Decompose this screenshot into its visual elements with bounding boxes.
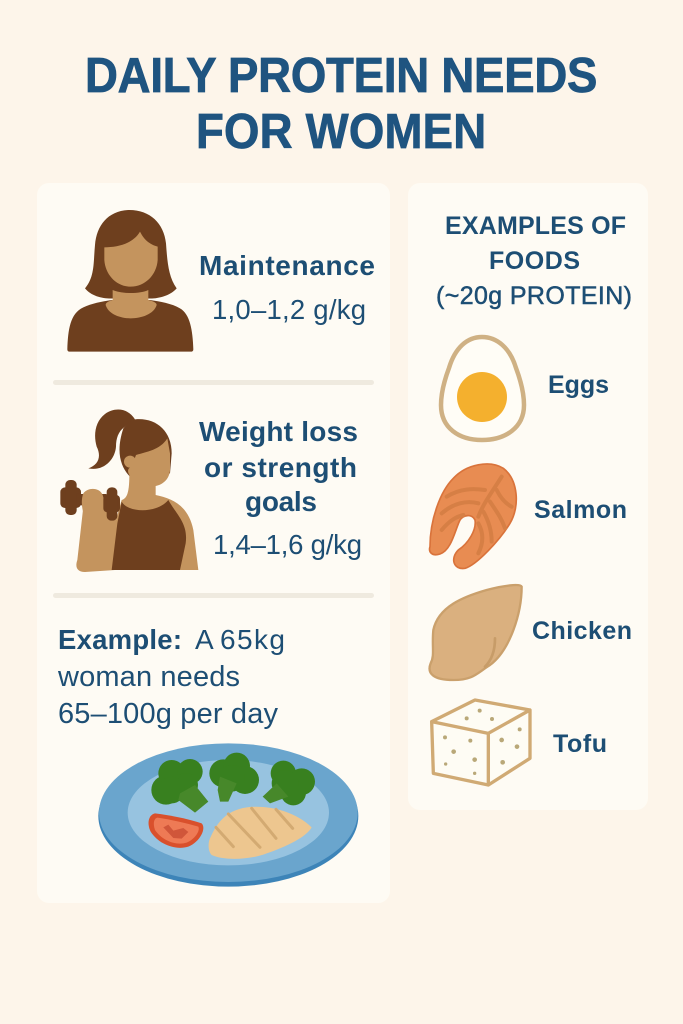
panel: examples of foods <box>408 183 648 810</box>
label: chicken: Chicken <box>532 617 632 645</box>
text: maintenance: 1,0–1,2 g/kg <box>212 294 366 325</box>
text: example: woman needs <box>57 661 240 693</box>
panel: protein requirements <box>37 183 390 903</box>
text: maintenance: Maintenance <box>199 250 375 281</box>
skin <box>112 438 198 570</box>
chicken <box>209 807 312 859</box>
title: FOR WOMEN <box>196 105 486 159</box>
broccoli right <box>263 761 315 805</box>
label: tofu: Tofu <box>553 730 607 758</box>
heading: examples of foods: (~20g PROTEIN) <box>436 282 632 310</box>
text: weight loss: 1,4–1,6 g/kg <box>213 529 362 560</box>
title <box>85 49 597 159</box>
text: maintenance <box>199 250 375 325</box>
heading: examples of foods: FOODS <box>489 247 580 275</box>
icon: woman with dumbbell <box>60 410 198 572</box>
text: example <box>57 624 285 730</box>
label: salmon: Salmon <box>534 496 627 524</box>
title: DAILY PROTEIN NEEDS <box>85 49 597 103</box>
icon: salmon <box>430 464 516 568</box>
broccoli left <box>151 759 208 813</box>
icon: chicken <box>430 585 522 680</box>
text: example: 65–100g per day <box>58 698 278 730</box>
tomato <box>149 813 203 848</box>
broccoli middle <box>209 753 259 802</box>
text: weight loss: Weight loss <box>199 416 358 447</box>
text: weight loss: or strength <box>204 452 357 483</box>
icon: egg <box>441 337 524 440</box>
text: example: 65kg <box>220 624 285 655</box>
text: example: Example: <box>58 624 182 655</box>
text: weight loss <box>199 416 362 560</box>
heading: examples of foods: EXAMPLES OF <box>445 212 626 240</box>
text: example: A <box>195 624 214 655</box>
icon: woman maintenance <box>67 210 193 352</box>
heading: examples of foods <box>436 212 632 310</box>
ponytail <box>88 410 135 469</box>
label: eggs: Eggs <box>548 371 609 399</box>
icon: tofu <box>432 700 530 785</box>
text: weight loss: goals <box>245 486 317 517</box>
icon: plate of food <box>98 743 358 887</box>
